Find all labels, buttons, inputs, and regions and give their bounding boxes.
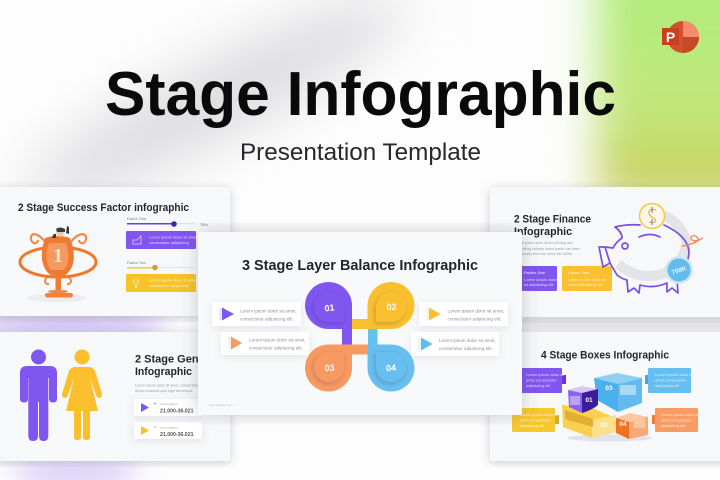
box 03 blue: 03 — [605, 385, 613, 392]
callout: purple label: Lorem ipsum dolor sit — [526, 372, 565, 377]
text block: finance description: Lorem ipsum dolor sit the printing and — [514, 241, 573, 245]
callout: yellow label: Lorem ipsum dolor sit — [520, 412, 559, 417]
callout: yellow label: amet consectetur — [520, 418, 551, 422]
callout: orange label: Lorem ipsum dolor sit — [661, 412, 700, 417]
callout: blue label: Lorem ipsum dolor sit — [655, 372, 694, 377]
slider: factor one: 75% — [200, 223, 208, 227]
icon: coin — [640, 204, 664, 228]
petal 01: 01 — [324, 302, 335, 313]
box stack — [562, 373, 652, 442]
stage card: left bottom: consectetur adipiscing elit. — [249, 346, 303, 350]
heading: gender line two: Infographic — [135, 366, 192, 378]
text block: gender description: donec euismod quis eget elit tempor — [135, 389, 194, 393]
icon: purple man — [20, 350, 57, 441]
stat card: yellow — [134, 422, 202, 439]
stat card: purple: Lorem ipsum — [160, 402, 178, 406]
callout: purple finance box — [514, 266, 558, 291]
connector: yellow — [352, 319, 368, 329]
heading: finance: 2 Stage Finance — [514, 214, 591, 226]
stage card: right bottom: consectetur adipiscing elit. — [439, 346, 493, 351]
callout: purple finance box: Factor One — [524, 270, 546, 275]
stage card: right bottom — [411, 332, 499, 356]
stage card: left bottom — [221, 332, 309, 355]
stat card: purple — [134, 399, 202, 416]
panel: 2 Stage Finance Infographic — [490, 187, 720, 317]
footer: url: www.website.com — [209, 403, 233, 407]
icon: PowerPoint logo: P — [666, 29, 675, 45]
callout: yellow factor box: Lorem ipsum dolor sit amet, — [149, 278, 198, 282]
callout: yellow factor box — [126, 274, 198, 292]
box 04 orange: 04 — [619, 421, 627, 428]
heading: success factor: 2 Stage Success Factor infographic — [18, 202, 189, 214]
heading: gender: 2 Stage Gender — [135, 354, 216, 366]
box 02 yellow: 02 — [600, 422, 608, 429]
icon: orange trophy: 1 — [53, 245, 63, 267]
callout: yellow label — [512, 408, 559, 432]
callout: yellow label: adipiscing elit — [520, 423, 545, 428]
badge: 798K — [665, 256, 693, 284]
subtitle: Presentation Template — [240, 139, 481, 166]
slider: factor two: Factor Two — [127, 261, 146, 265]
icon: orange trophy — [20, 226, 96, 302]
panel: 4 Stage Boxes Infographic — [490, 332, 720, 461]
connector: purple — [342, 329, 352, 345]
callout: yellow factor box: consectetur adipiscing — [149, 283, 189, 288]
petal 03: 03 — [324, 363, 335, 373]
stage card: left top — [212, 302, 301, 326]
callout: purple label: amet consectetur — [526, 378, 557, 382]
stage card: left top: Lorem ipsum dolor sit amet, — [240, 308, 297, 314]
icon: yellow woman — [62, 350, 102, 440]
callout: orange label — [652, 408, 700, 432]
callout: purple factor box — [126, 231, 198, 249]
stat card: yellow: 21.000-36.021 — [160, 432, 194, 438]
slider: factor one: Factor One — [127, 217, 146, 221]
petal 04: 04 — [386, 363, 396, 373]
stage card: right bottom: Lorem ipsum dolor sit amet, — [439, 338, 496, 343]
badge: 798K: 798K — [671, 265, 688, 277]
heading: finance line two: Infographic — [514, 226, 572, 238]
callout: yellow finance box: amet adipiscing elit — [568, 282, 603, 287]
callout: blue label: amet consectetur — [655, 378, 686, 382]
icon: PowerPoint logo — [662, 21, 699, 53]
text block: gender description: Lorem ipsum dolor sit amet, consectetur adipiscing — [135, 384, 216, 388]
callout: purple factor box: consectetur adipiscing — [149, 240, 189, 245]
panel: 2 Stage Success Factor infographic — [0, 187, 230, 316]
callout: yellow finance box: Factor Two — [568, 270, 590, 275]
slider: factor one — [127, 217, 208, 227]
callout: purple label: adipiscing elit — [526, 383, 551, 388]
petal 02: 02 — [386, 302, 397, 312]
icon: piggy bank — [599, 214, 703, 293]
stat card: purple: 21.000-36.021 — [160, 408, 194, 414]
callout: yellow finance box: Lorem ipsum dolor sit — [568, 277, 607, 282]
connector: orange — [352, 344, 368, 354]
callout: purple finance box: Lorem ipsum dolor — [524, 277, 558, 282]
text block: finance description — [514, 241, 580, 256]
connector: blue — [368, 329, 378, 345]
petal diagram — [305, 282, 414, 391]
text block: gender description — [135, 384, 216, 393]
panel: 3 Stage Layer Balance Infographic — [198, 232, 522, 415]
callout: blue label: adipiscing elit — [655, 383, 680, 388]
callout: purple label — [520, 368, 566, 393]
text block: finance description: the industry text ever since the 1500s — [514, 252, 572, 256]
stage card: left top: consectetur adipiscing elit. — [240, 316, 294, 322]
title: Stage Infographic — [105, 60, 616, 129]
callout: yellow finance box — [562, 266, 612, 291]
slider: factor two — [127, 261, 195, 270]
stat card: yellow: Lorem ipsum — [160, 426, 178, 430]
stage card: left bottom: Lorem ipsum dolor sit amet, — [249, 338, 306, 342]
callout: orange label: adipiscing elit — [661, 423, 686, 428]
callout: blue label — [645, 368, 694, 393]
stage card: right top: Lorem ipsum dolor sit amet, — [448, 308, 504, 314]
stage card: right top: consectetur adipiscing elit. — [448, 316, 501, 322]
heading: boxes: 4 Stage Boxes Infographic — [541, 350, 669, 362]
box 01 purple: 01 — [585, 397, 593, 404]
heading: layer balance: 3 Stage Layer Balance Infographic — [242, 258, 478, 274]
callout: purple finance box: sit adipiscing elit — [524, 282, 554, 287]
text block: finance description: typesetting industry lorem ipsum has been — [514, 247, 580, 251]
stage card: right top — [419, 302, 508, 326]
panel: 2 Stage Gender Infographic — [0, 332, 230, 461]
callout: purple factor box: Lorem ipsum dolor sit amet, — [149, 234, 198, 240]
callout: orange label: amet consectetur — [661, 418, 692, 422]
